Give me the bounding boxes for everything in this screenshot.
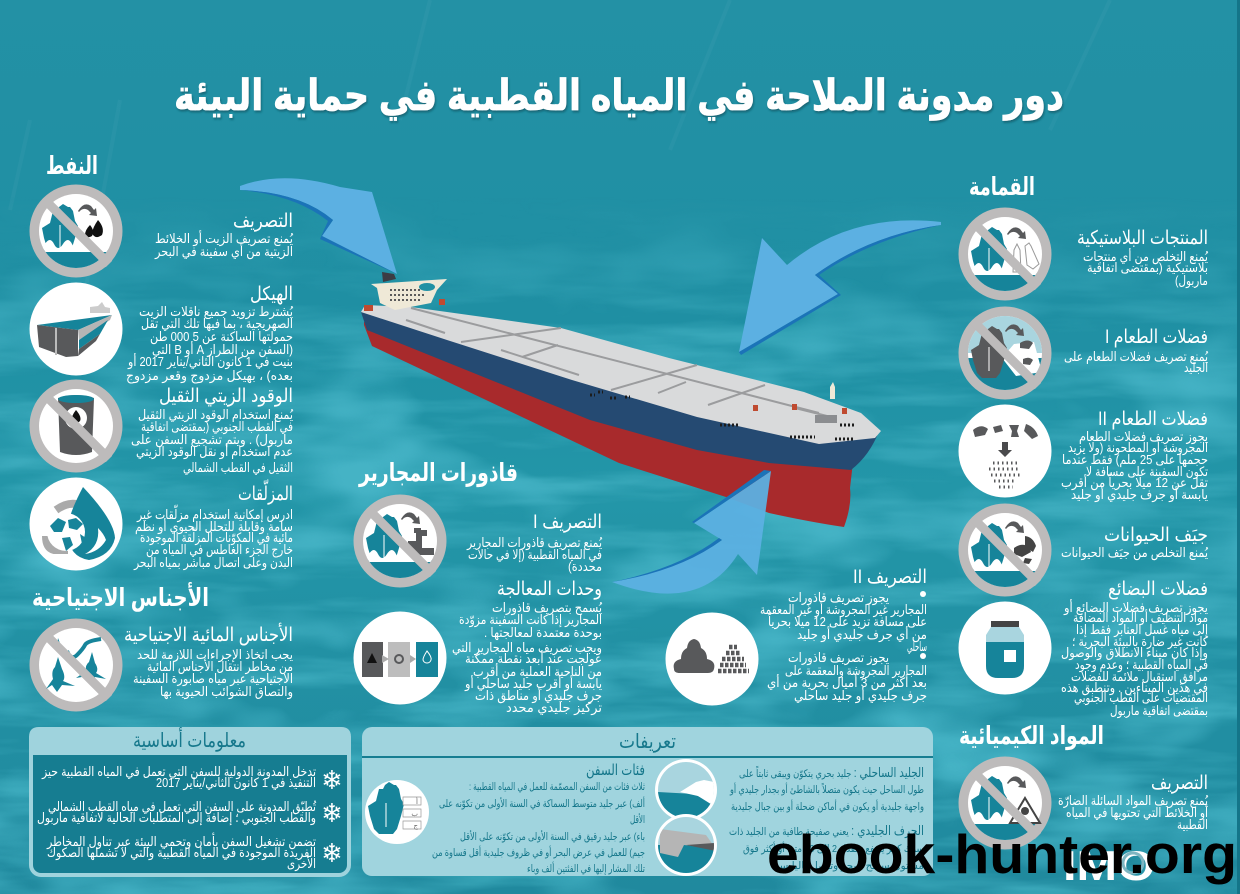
text: heavy fuel oil: ماربول) . ويتم تشجيع السفن على xyxy=(131,432,293,448)
icon: ship categories: أ xyxy=(416,797,418,806)
text: aquatic invasive species: والتصاق الشوائب الحيوية بها xyxy=(160,684,293,700)
text: chemical discharge: التصريف xyxy=(1151,773,1208,794)
arrow: to ship deck xyxy=(739,220,941,355)
text: fast ice and ice shelf: الجرف الجليدي : يعني صفيحة طافية من الجليد ذات xyxy=(729,823,924,839)
text: lubricants: مائية في المكوّنات المزلّقة الموجودة xyxy=(140,527,293,546)
text: plastics xyxy=(1077,228,1209,289)
text: treatment units: المجارير إذا كانت السفينة مزوّدة xyxy=(459,612,602,628)
icon: double hull xyxy=(30,282,122,376)
text: plastics: ماربول) xyxy=(1175,273,1208,289)
icon: ship categories xyxy=(365,780,429,844)
text: heavy fuel oil: الوقود الزيتي الثقيل xyxy=(159,386,293,407)
item: safe operation: الأخرى xyxy=(287,855,316,872)
icon: no heavy fuel oil xyxy=(30,380,122,472)
text: food waste II: يابسة أو جرف جليدي أو جليد xyxy=(1071,486,1208,503)
text: discharge I: في المياه القطبية (إلا في حالات xyxy=(468,547,602,562)
text: treatment units: وحدات المعالجة xyxy=(497,579,602,600)
watermark: ebook-hunter.org xyxy=(767,823,1237,885)
text: plastics: المنتجات البلاستيكية xyxy=(1077,228,1208,249)
text: lubricants: خارج الجزء الغاطس في المياه من xyxy=(146,542,293,558)
text: discharge: التصريف xyxy=(233,211,293,232)
text: cargo residues: بمقتضى اتفاقية ماربول xyxy=(1110,703,1208,719)
text: discharge II: على مسافة تزيد على 12 ميلا بحرياً xyxy=(768,612,927,630)
panel: oil xyxy=(30,152,294,571)
text: animal carcasses xyxy=(1061,525,1209,561)
text: hull: بعده) ، بهيكل مزدوج وقعر مزدوج xyxy=(126,368,293,384)
text: treatment units: يابسة أو أقرب جليد ساحلي أو xyxy=(464,675,602,692)
text: treatment units: عولجت عند أبعد نقطة ممكنة xyxy=(465,650,602,667)
text: heavy fuel oil: عدم استخدام أو نقل الوقود الزيتي xyxy=(136,443,293,460)
text: fast ice and ice shelf: الجليد الساحلي : جليد بحري يتكوّن ويبقى ثابتاً على xyxy=(739,765,924,780)
item: application: ❄ xyxy=(321,798,343,828)
text: hull: حمولتها الساكنة عن 5 000 طن xyxy=(150,329,293,345)
text: food waste II: فضلات الطعام II xyxy=(1098,409,1208,430)
text: lubricants: سامة وقابلة للتحلل الحيوي أو نظم xyxy=(135,518,293,535)
heading: basic information: معلومات أساسية xyxy=(133,727,246,752)
text: discharge II: المجارير غير المجروشة أو غير المعقمة xyxy=(760,601,927,618)
text: food waste I: الجليد xyxy=(1184,360,1208,375)
text: fast ice and ice shelf xyxy=(729,765,924,872)
icon: no food waste on ice xyxy=(958,306,1052,400)
deck xyxy=(361,305,881,444)
icon: ship categories: ب xyxy=(411,811,418,818)
text: food waste II: تكون السفينة على مسافة لا xyxy=(1086,464,1208,480)
title: دور مدونة الملاحة في المياه القطبية في حماية البيئة xyxy=(174,72,1064,121)
text: fast ice and ice shelf: واجهة جليدية أو يكون في أماكن ضحلة أو بين جبال جليدية xyxy=(731,799,924,813)
text: ship categories: الأقل xyxy=(630,813,645,826)
text: chemical discharge: أو الخلائط التي تحتويها في المياه xyxy=(1066,804,1208,821)
icon: ice shelf xyxy=(655,814,717,876)
text: hull: (السفن من الطراز A أو B التي xyxy=(152,341,293,358)
superstructure xyxy=(371,279,447,310)
text: treatment units: بوحدة معتمدة لمعالجتها . xyxy=(484,625,602,641)
text: cargo residues: في هذين الميناءين . وتنطبق هذه xyxy=(1061,680,1208,696)
text: animal carcasses: جيَف الحيوانات xyxy=(1104,525,1208,546)
panel: chemicals xyxy=(958,722,1209,850)
text: hull: يُشترط تزويد جميع ناقلات الزيت xyxy=(139,304,294,320)
text: heavy fuel oil: في القطب الجنوبي (بمقتضى اتفاقية xyxy=(141,419,293,435)
text: treatment units: تركيز جليدي محدد xyxy=(506,700,602,716)
heading: garbage: القمامة xyxy=(969,173,1035,201)
text: discharge I xyxy=(466,512,603,574)
logo: IMO: IMO xyxy=(1063,842,1155,889)
text: cargo residues: إلى مياه غسل العنابر فقط إذا xyxy=(1076,622,1208,638)
text: discharge I: يُمنع تصريف قاذورات المجارير xyxy=(466,535,603,551)
text: fast ice and ice shelf: طول الساحل حيث يكون متصلاً بالشاطئ أو بجدار جليدي أو xyxy=(729,782,924,796)
deck pipelines xyxy=(406,308,835,418)
text: discharge II: المجارير المجروشة والمعقمة على xyxy=(785,663,927,679)
text: discharge I: التصريف I xyxy=(533,512,602,533)
icon: no invasive species xyxy=(30,618,122,712)
text: discharge II: يجوز تصريف قاذورات xyxy=(788,650,889,666)
panel: invasive species xyxy=(30,582,293,712)
text: heavy fuel oil: يُمنع استخدام الوقود الزيتي الثقيل xyxy=(138,407,294,423)
text: cargo residues: فضلات البضائع xyxy=(1108,579,1208,600)
panel: sewage xyxy=(354,459,927,716)
item: application: والقطب الجنوبي ؛ إضافة إلى المتطلبات الحالية لاتفاقية ماربول xyxy=(37,810,316,826)
text: plastics: يُمنع التخلص من أي منتجات xyxy=(1083,248,1209,265)
text: treatment units xyxy=(452,579,603,716)
text: cargo residues: مرافق استقبال ملائمة للفضلات xyxy=(1071,669,1208,685)
icon: ship categories: ج xyxy=(413,823,418,830)
text: ship categories: جيم) للعمل في عرض البحر أو في ظروف جليدية أقل قساوة من xyxy=(432,845,645,859)
text: discharge I: محددة) xyxy=(568,559,602,574)
text: aquatic invasive species: يجب اتخاذ الإجراءات اللازمة للحد xyxy=(137,647,293,663)
text: discharge xyxy=(154,211,294,260)
text: chemical discharge: القطبية xyxy=(1177,817,1208,832)
text: aquatic invasive species: الاجتياحية عبر مياه صابورة السفينة xyxy=(133,671,293,687)
text: ship categories: ألف) عبر جليد متوسط السماكة في السنة الأولى من تكوّنه على xyxy=(439,796,645,810)
text: discharge II: ساحلي xyxy=(907,639,927,654)
heading: chemicals: المواد الكيميائية xyxy=(959,722,1104,751)
arrow: to ship stern xyxy=(240,178,397,274)
text: cargo residues: كانت غير ضارة بالبيئة البحرية ؛ xyxy=(1072,634,1209,650)
text: food waste I xyxy=(1064,327,1209,375)
item: safe operation: الفريدة الموجودة في المياه القطبية والتي لا تشملها الصكوك xyxy=(47,845,316,861)
text: chemical discharge xyxy=(1058,773,1209,832)
text: chemical discharge: يُمنع تصريف المواد السائلة الضارّة xyxy=(1058,793,1209,809)
text: lubricants xyxy=(133,480,293,571)
icon: ground food waste xyxy=(958,404,1052,498)
heading: sewage: قاذورات المجارير xyxy=(357,459,518,488)
heading: oil: النفط xyxy=(46,152,98,180)
panel: definitions xyxy=(362,727,933,876)
text: lubricants: ادرس إمكانية استخدام مزلّقات غير xyxy=(136,504,293,523)
text: aquatic invasive species: من مخاطر انتقال الأجناس المائية xyxy=(147,658,293,675)
text: ship categories: فئات السفن xyxy=(586,762,645,779)
item: safe operation: تضمن تشغيل السفن بأمان وتحمي البيئة عبر تناول المخاطر xyxy=(46,832,316,850)
icon: untreated and comminuted sewage xyxy=(666,612,758,706)
text: treatment units: جرف جليدي أو مناطق ذات xyxy=(475,687,602,704)
text: discharge: الزيتية من أي سفينة في البحر xyxy=(154,243,293,260)
text: aquatic invasive species xyxy=(124,623,293,700)
text: discharge: يُمنع تصريف الزيت أو الخلائط xyxy=(155,230,294,247)
item: entry into force: ❄ xyxy=(321,765,343,795)
text: discharge II: يجوز تصريف قاذورات xyxy=(788,590,889,606)
text: animal carcasses: يُمنع التخلص من جيَف الحيوانات xyxy=(1061,545,1209,561)
text: food waste I: فضلات الطعام I xyxy=(1105,327,1208,348)
bridge windows xyxy=(390,290,426,300)
text: discharge II: جرف جليدي أو جليد ساحلي xyxy=(794,687,927,704)
text: plastics: بلاستيكية (بمقتضى اتفاقية xyxy=(1087,260,1208,275)
text: treatment units: يُسمح بتصريف قاذورات xyxy=(492,600,603,616)
text: ship categories: تلك المشار إليها في الفئتين ألف وباء xyxy=(527,861,645,875)
text: hull xyxy=(126,284,294,384)
text: discharge II: من أي جرف جليدي أو جليد xyxy=(797,626,927,643)
text: ship categories: باء) عبر جليد رقيق في السنة الأولى من تكوّنه على الأقل xyxy=(460,830,645,843)
text: treatment units: من الناحية العملية من أقرب xyxy=(473,663,602,680)
text: ship categories xyxy=(432,762,645,875)
text: food waste II: حجمها على 25 ملم) فقط عندما xyxy=(1062,452,1208,468)
item: safe operation xyxy=(46,832,343,872)
heading: invasive species: الأجناس الاجتياحية xyxy=(32,582,209,612)
text: aquatic invasive species: الأجناس المائية الاجتياحية xyxy=(124,623,293,646)
deck fittings xyxy=(590,392,854,439)
text: food waste I: يُمنع تصريف فضلات الطعام على xyxy=(1064,349,1209,365)
arrow: to ship hull xyxy=(612,470,771,594)
item: application xyxy=(37,798,343,828)
icon: fast ice xyxy=(655,759,717,821)
text: cargo residues: المقتضيات على القطب الجنوبي xyxy=(1074,690,1208,706)
item: application: تُطبّق المدونة على السفن التي تعمل في مياه القطب الشمالي xyxy=(48,799,317,815)
hull: blue topside xyxy=(361,312,879,470)
heading: definitions: تعريفات xyxy=(619,731,676,753)
text: discharge II xyxy=(760,567,927,704)
panel: basic information xyxy=(29,727,351,875)
text: heavy fuel oil: الثقيل في القطب الشمالي xyxy=(183,460,293,475)
icon: cargo residue jar xyxy=(958,602,1052,694)
text: cargo residues: يجوز تصريف فضلات البضائع أو xyxy=(1063,599,1208,616)
text: discharge II: بعد أكثر من 3 أميال بحرية من أي xyxy=(767,674,927,691)
text: cargo residues: في المياه القطبية ؛ وعدم وجود xyxy=(1075,657,1208,673)
icon: no plastics xyxy=(958,208,1052,300)
item: entry into force: التنفيذ في 1 كانون الثاني/يناير 2017 xyxy=(156,775,316,791)
item: entry into force xyxy=(41,764,343,795)
icon: no chemical discharge xyxy=(958,756,1052,850)
text: food waste II xyxy=(1061,409,1208,503)
text: lubricants: البدن وعلى اتصال مباشر بمياه البحر xyxy=(133,555,293,571)
text: hull: الهيكل xyxy=(250,284,293,305)
tanker ship illustration xyxy=(361,272,881,527)
text: fast ice and ice shelf: سمك كبير يرتفع بمقدار 2 إلى 50 مترا أو أكثر فوق xyxy=(743,841,924,855)
text: hull: الصهريجية ، بما فيها تلك التي تقل xyxy=(141,316,293,332)
item: entry into force: تدخل المدونة الدولية للسفن التي تعمل في المياه القطبية حيز xyxy=(41,764,316,780)
icon: no animal carcasses xyxy=(958,504,1052,596)
hull: red underbody xyxy=(364,322,853,527)
text: lubricants: المزلّقات xyxy=(238,480,293,505)
icon: no sewage discharge xyxy=(354,494,446,588)
icon: no oil discharge xyxy=(30,184,122,278)
text: fast ice and ice shelf: مستوى سطح البحر وتتصل باليابسة xyxy=(774,860,924,872)
icon: lubricants xyxy=(30,478,122,570)
text: heavy fuel oil xyxy=(131,386,294,475)
text: ship categories: ثلاث فئات من السفن المصمّمة للعمل في المياه القطبية : xyxy=(469,781,645,793)
text: hull: بنيت في 1 كانون الثاني/يناير 2017 أو xyxy=(127,353,293,370)
text: food waste II: تقل عن 12 ميلا بحرياً من أقرب xyxy=(1061,473,1208,491)
panel: garbage xyxy=(958,173,1209,719)
text: food waste II: يجوز تصريف فضلات الطعام xyxy=(1079,429,1208,445)
text: cargo residues xyxy=(1061,579,1209,719)
icon: treatment units xyxy=(354,612,446,704)
text: cargo residues: مواد التنظيف أو المواد المضافة xyxy=(1073,609,1208,626)
text: treatment units: ويجب تصريف مياه المجارير التي xyxy=(452,640,602,656)
text: discharge II: التصريف II xyxy=(853,567,927,588)
text: food waste II: المجروشة أو المطحونة (ولا يزيد xyxy=(1068,439,1208,456)
item: safe operation: ❄ xyxy=(321,838,343,868)
text: cargo residues: وإذا كان ميناء الانطلاق والوصول xyxy=(1061,645,1208,661)
